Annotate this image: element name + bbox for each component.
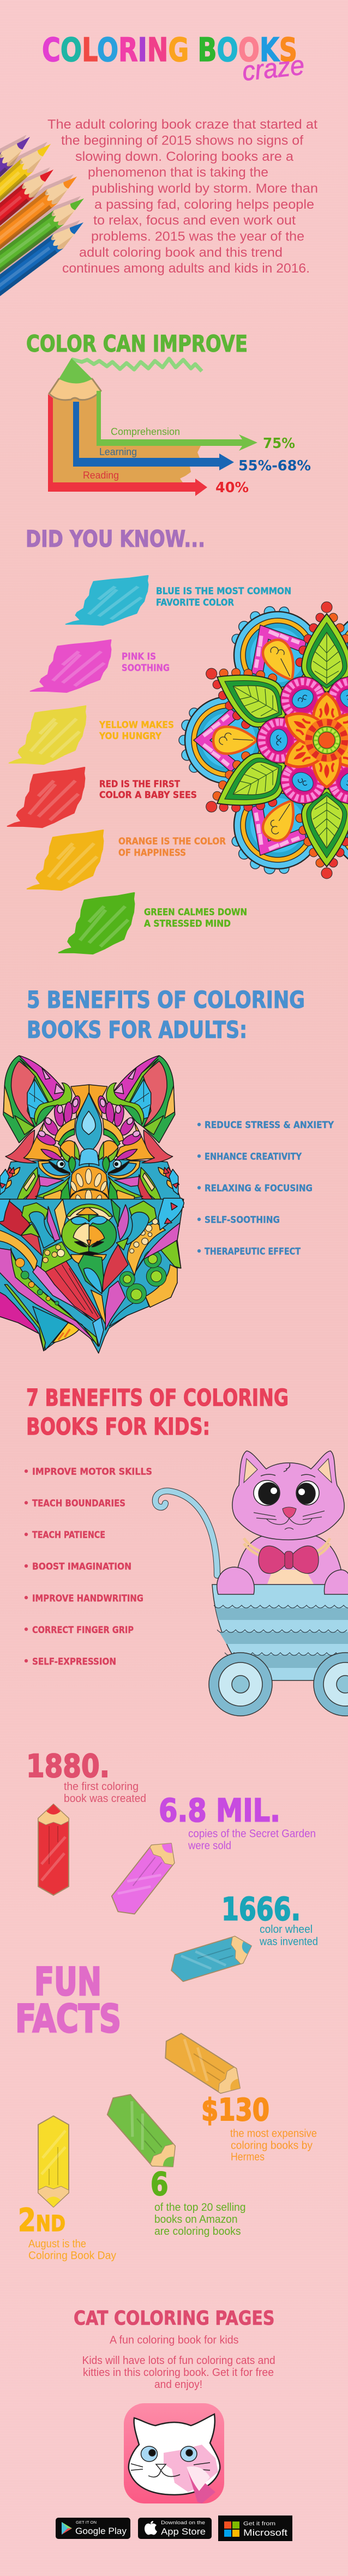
promo description [82,2355,275,2391]
heading: color can improve: COLOR CAN IMPROVE [26,330,248,357]
badge: app store: Download on the [161,2520,205,2525]
cat bow knot [285,1551,293,1569]
stat: $130 [201,2093,317,2163]
cat eyes [254,1480,319,1505]
stat: 1880: the first coloring [64,1781,139,1793]
list: adult benefits: RELAXING & FOCUSING [205,1183,313,1194]
app cat eyes [141,2446,197,2462]
cat ears inner [244,1459,332,1483]
list: adult benefits: REDUCE STRESS & ANXIETY [205,1120,334,1130]
swatch: orange [27,830,103,890]
stat: 1666: was invented [259,1936,318,1948]
stat: 6.8 mil: copies of the Secret Garden [188,1828,316,1840]
list: kid benefits: TEACH BOUNDARIES [32,1498,125,1509]
stat: 1666 [221,1891,318,1948]
stat: 6: books on Amazon [154,2214,238,2226]
cat chest [267,1570,314,1584]
icon: yellow pencil [38,2116,69,2207]
illustration: wolf lower body [0,1198,184,1353]
list: adult benefits: THERAPEUTIC EFFECT [205,1247,301,1257]
intro paragraph: problems. 2015 was the year of the [91,229,304,244]
cat brows and forehead mark [261,1464,315,1477]
wolf gem inner [82,1111,95,1135]
list: kid benefits: IMPROVE MOTOR SKILLS [32,1467,152,1478]
stat: 2nd: 2ND [18,2202,65,2239]
stat: 6.8 mil: were sold [188,1840,231,1852]
list: kid benefits: TEACH PATIENCE [32,1530,105,1541]
stat: 6: are coloring books [154,2226,241,2238]
badge: microsoft: Microsoft [243,2527,287,2538]
stat: 2nd [18,2202,116,2262]
title script word: craze [241,50,306,87]
icon: red pencil [38,1804,69,1895]
stat: 2nd: Coloring Book Day [28,2250,116,2262]
swatch: yellow [9,706,86,764]
list: adult benefits: ENHANCE CREATIVITY [205,1151,302,1162]
pram wheels [209,1653,348,1716]
label: learning: Learning [99,446,137,457]
fact: yellow [99,719,174,742]
stat: 6: of the top 20 selling [154,2202,245,2214]
list: kid benefits: CORRECT FINGER GRIP [32,1625,134,1636]
arrow: reading [48,394,207,496]
wolf forehead gem [76,1093,102,1153]
icon: green pencil [101,2088,184,2176]
cat paws [217,1567,348,1594]
promo subtitle: A fun coloring book for kids [110,2334,239,2346]
pram handle [155,1491,217,1575]
arrow: comprehension [97,391,257,451]
badge: google play: GET IT ON [76,2520,97,2525]
stat: 6: 6 [151,2166,168,2203]
intro paragraph: The adult coloring book craze that started at [47,117,317,132]
fact: orange: OF HAPPINESS [118,848,186,858]
wolf snout arch [69,1188,109,1200]
swatch: red [8,767,85,827]
fact: blue [156,586,291,608]
swatch: pink [31,640,111,692]
cat collar [244,1538,330,1559]
heading: fun facts: FUN [34,1960,101,2004]
heading: benefits for adults: BOOKS FOR ADULTS: [27,1017,247,1044]
illustration: mandala [179,590,348,890]
panel: color facts [8,576,291,954]
badge: microsoft: Get it from [243,2521,275,2527]
app cat nose and mouth [131,2463,210,2477]
arrow: learning [73,402,234,470]
intro paragraph: phenomenon that is taking the [88,165,268,180]
badge: microsoft [218,2515,292,2541]
icon: blue pencil [167,1932,256,1984]
fact: green: A STRESSED MIND [144,918,231,929]
wolf snout upper [69,1166,110,1209]
promo description: Kids will have lots of fun coloring cats and [82,2355,275,2367]
illustration: mandala wolf [0,1056,184,1209]
value: 75%: 75% [263,436,295,452]
label: reading: Reading [83,470,119,481]
stat: 1880: book was created [64,1793,146,1805]
fact: blue: BLUE IS THE MOST COMMON [156,586,291,597]
badge: google play: Google Play [75,2526,127,2536]
promo: cat coloring pages [74,2307,275,2391]
fact: pink [122,651,170,674]
pram scallop lines [214,1605,348,1655]
fact: yellow: YELLOW MAKES [99,719,174,730]
heading: benefits for adults [27,987,305,1044]
heading: fun facts [15,1960,121,2041]
intro paragraph: to relax, focus and even work out [93,213,296,228]
cat body [235,1534,344,1586]
stat: $130: coloring books by [231,2140,313,2152]
icon: orange pencil [158,2029,248,2101]
heading: fun facts: FACTS [15,1997,121,2041]
intro paragraph: the beginning of 2015 shows no signs of [61,133,303,148]
chart: pencil arrows [48,358,311,496]
intro paragraph: adult coloring book and this trend [79,245,283,260]
swatch: green [59,893,134,954]
fact: pink: SOOTHING [122,663,170,674]
stat: $130: the most expensive [230,2128,317,2140]
list: kid benefits: BOOST IMAGINATION [32,1562,131,1573]
list: kid benefits [25,1467,152,1667]
badge: app store [138,2518,212,2539]
intro paragraph [47,117,318,276]
intro paragraph: continues among adults and kids in 2016. [62,261,310,276]
fact: red: RED IS THE FIRST [99,779,180,790]
stat: 1880 [26,1747,146,1805]
fact: orange [118,836,226,858]
pencil lead [59,358,92,384]
stat: $130: Hermes [231,2151,265,2163]
intro paragraph: a passing fad, coloring helps people [94,197,314,212]
pram scallop bands [215,1608,348,1668]
list: adult benefits: SELF-SOOTHING [205,1215,280,1226]
cat nose [283,1507,296,1518]
icon: colored pencils [0,128,89,328]
promo: cat coloring pages: CAT COLORING PAGES [74,2307,275,2330]
heading: did you know: DID YOU KNOW... [26,525,205,552]
fact: blue: FAVORITE COLOR [156,597,234,608]
title: COLORING BOOKS [42,31,297,69]
value: 40%: 40% [215,480,249,496]
cat bow [259,1546,319,1574]
app pencil [187,2467,215,2504]
app cat face [129,2414,220,2495]
promo description: and enjoy! [154,2379,202,2391]
app cat paint [164,2445,218,2492]
label: comprehension: Comprehension [111,426,180,437]
list: kid benefits: IMPROVE HANDWRITING [32,1593,143,1604]
pram basket [212,1585,348,1680]
cat mouth and whiskers [254,1511,325,1529]
stat: 6.8 mil: 6.8 MIL. [159,1792,280,1829]
intro paragraph: publishing world by storm. More than [92,182,318,196]
fact: green: GREEN CALMES DOWN [144,907,247,918]
fact: red [99,779,197,801]
wolf bridge [79,1148,99,1165]
stat: 1666: 1666. [221,1891,301,1928]
fact: green [144,907,247,929]
pencil tip squiggle [71,359,202,371]
value: 55%-68%: 55%-68% [238,458,311,474]
stat: 6 [151,2166,245,2238]
list: adult benefits [197,1120,334,1257]
app page curl [187,2466,210,2491]
icon: cat app [124,2403,224,2504]
cat head [232,1451,344,1540]
fact: pink: PINK IS [122,651,156,662]
pencil body [53,395,201,482]
list: kid benefits: SELF-EXPRESSION [32,1656,116,1667]
heading: benefits for kids [26,1384,289,1441]
stat: 2nd: August is the [28,2238,86,2250]
fact: orange: ORANGE IS THE COLOR [118,836,226,847]
fact: yellow: YOU HUNGRY [99,731,162,742]
badge: app store: App Store [161,2526,206,2537]
title [42,31,306,87]
stat: $130: $130 [201,2093,269,2128]
illustration: cat in pram [155,1451,348,1716]
wolf snout petals [69,1169,108,1208]
swatch: blue [66,576,148,625]
icon: pink pencil [106,1835,183,1920]
fact: red: COLOR A BABY SEES [99,790,197,801]
stat: 1880: 1880. [26,1747,110,1785]
promo description: kitties in this coloring book. Get it for free [83,2367,274,2379]
stat: 1666: color wheel [260,1924,313,1936]
pencil wood [49,379,101,400]
stat: 6.8 mil [159,1792,316,1852]
heading: benefits for kids: BOOKS FOR KIDS: [26,1413,210,1441]
intro paragraph: slowing down. Coloring books are a [75,149,294,164]
badge: google play [56,2518,130,2539]
